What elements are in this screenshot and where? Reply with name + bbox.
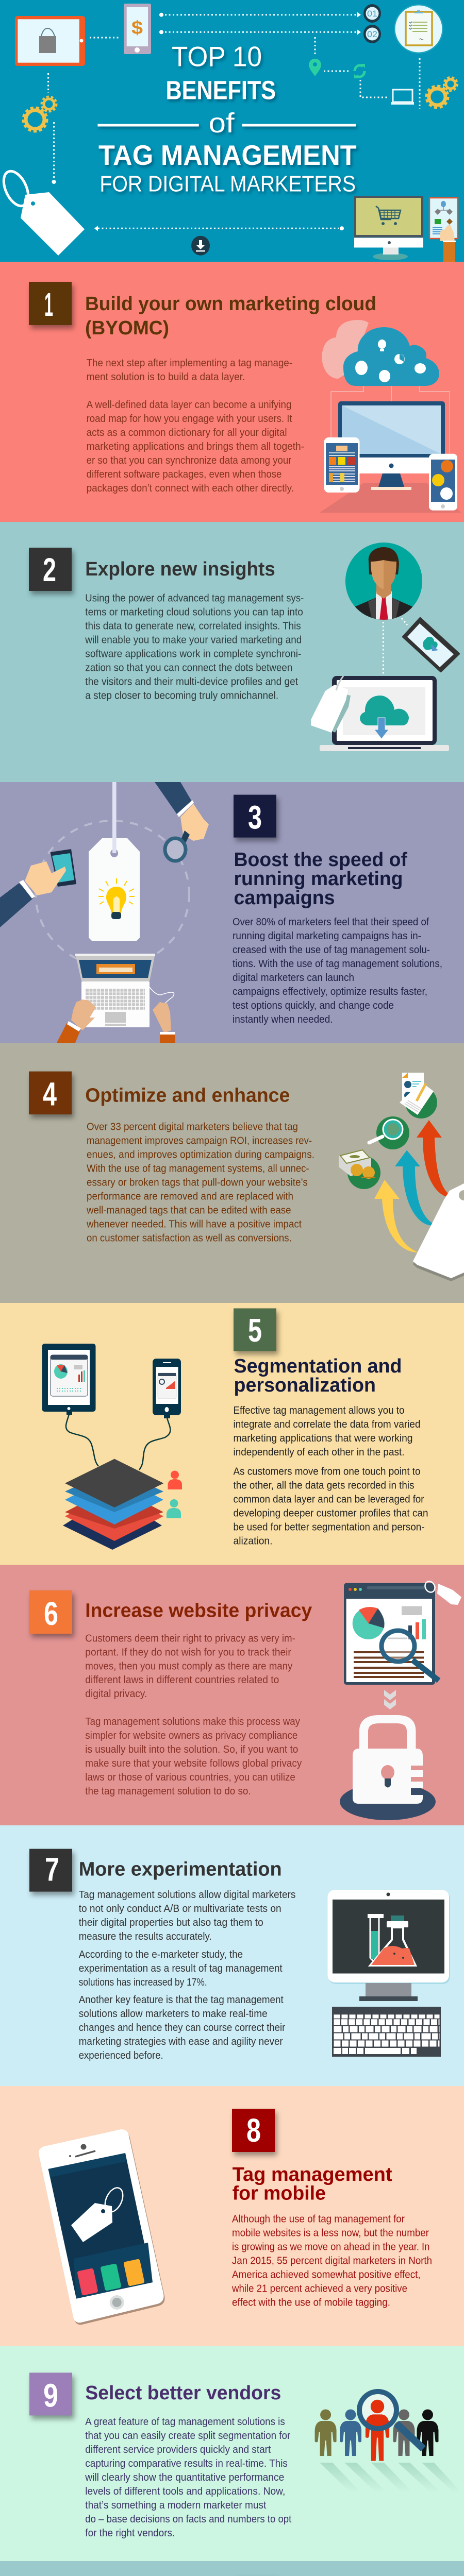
icon: refresh arrows — [354, 64, 365, 78]
icon: badge 01: 01 — [367, 9, 377, 19]
arrow: dotted line to 01 — [159, 12, 361, 18]
heading — [234, 1355, 402, 1396]
body text: essary or broken tags that pull-down your website’s — [87, 1177, 308, 1188]
number box 8 — [232, 2109, 275, 2152]
body text: integrate and correlate the data from varied — [233, 1418, 421, 1430]
body text: moves, then you must comply as there are many — [85, 1660, 293, 1672]
body text: creased with the use of tag management solu- — [233, 944, 430, 956]
icon: large price tag — [0, 167, 85, 256]
panel: section 7 more experimentation — [0, 1825, 464, 2086]
icon: gears left — [23, 97, 57, 131]
body text — [233, 916, 442, 1025]
icon: phone with dollar sign: $ — [131, 17, 143, 38]
illustration: hand with magnifier — [155, 782, 209, 861]
heading: personalization — [234, 1375, 376, 1396]
number box 2: 2 — [43, 551, 56, 588]
title: TOP 10 — [172, 40, 262, 72]
heading: Boost the speed of — [234, 849, 407, 871]
body text: whenever needed. This will have a positive impact — [86, 1218, 302, 1230]
body text: mobile websites is a less now, but the number — [232, 2227, 429, 2239]
body text: experimentation as a result of tag management — [79, 1962, 283, 1974]
heading: for mobile — [233, 2182, 326, 2204]
illustration: stacked layers — [63, 1459, 163, 1550]
heading: More experimentation — [79, 1859, 282, 1880]
number box 2 — [29, 548, 72, 591]
heading — [85, 293, 376, 339]
heading: Segmentation and — [234, 1355, 402, 1377]
body text: on customer satisfaction as well as conversions. — [87, 1232, 292, 1244]
illustration: documents on green circle — [400, 1073, 437, 1118]
body text: Customers deem their right to privacy as very im- — [85, 1633, 295, 1645]
panel: section 10 reduce digital marketing costs — [0, 2561, 464, 2576]
icon: clipboard — [394, 4, 443, 54]
body text: independently of each other in the past. — [233, 1446, 404, 1458]
arrow: dotted line to 02 — [159, 29, 361, 35]
body text: A well-defined data layer can become a unifying — [87, 399, 291, 411]
body text — [85, 2416, 292, 2539]
body text: a step closer to becoming truly omnichannel. — [85, 689, 278, 702]
body text: different service providers quickly and start — [85, 2444, 271, 2455]
icon: badge 02 — [363, 25, 381, 43]
number box 1: 1 — [44, 286, 53, 323]
body text: different software packages, even when those — [87, 468, 281, 480]
body text: simpler for website owners as privacy compliance — [85, 1730, 297, 1741]
illustration: big white tag — [413, 1183, 464, 1281]
body text: levels of different tools and applications. Now, — [85, 2485, 285, 2497]
body text: for the right vendors. — [85, 2527, 175, 2539]
body text: management improves campaign ROI, increases rev- — [87, 1134, 312, 1147]
body text — [86, 1121, 314, 1244]
body text: while 21 percent achieved a very positive — [231, 2282, 407, 2295]
body text: capturing comparative results in real-time. This — [85, 2458, 288, 2469]
panel: header — [0, 0, 464, 262]
icon: gears right — [426, 77, 457, 108]
number box 3 — [234, 795, 276, 838]
illustration: phone — [153, 1359, 181, 1418]
heading: running marketing — [234, 868, 403, 890]
title: TAG MANAGEMENT — [98, 139, 357, 171]
heading: Tag management — [233, 2164, 392, 2185]
number box 8: 8 — [246, 2112, 261, 2149]
body text: the visitors and their multi-device profiles and get — [85, 676, 298, 687]
icon: laptop — [391, 90, 414, 105]
illustration: laptop with cloud download and tag — [311, 676, 449, 751]
body text: Another key feature is that the tag management — [79, 1994, 284, 2006]
body text: digital privacy. — [85, 1688, 147, 1700]
icon: location pin — [309, 59, 321, 76]
title: of — [209, 108, 235, 139]
body text: common data layer and can be leveraged for — [233, 1493, 424, 1505]
body text — [233, 1404, 428, 1547]
body text: Although the use of tag management for — [232, 2213, 405, 2225]
body text: ment solution is to build a data layer. — [87, 371, 245, 383]
illustration: tablet — [42, 1344, 96, 1415]
body text: portant. If they do not wish for you to track their — [85, 1647, 291, 1658]
illustration: phone with tag — [39, 2129, 165, 2325]
body text: digital marketers can launch — [233, 972, 354, 984]
illustration: laptop with hands — [57, 954, 175, 1043]
body text: performance are removed and are replaced with — [87, 1190, 293, 1202]
number box 6 — [29, 1590, 72, 1634]
illustration: hand holding phone — [0, 849, 76, 927]
icon: badge 02: 02 — [367, 29, 377, 39]
body text: this data to generate new, correlated insights. This — [85, 620, 301, 632]
number box 4 — [29, 1072, 72, 1114]
body text: Jan 2015, 55 percent digital marketers in North — [232, 2255, 432, 2267]
title — [97, 40, 357, 197]
body text: is growing as we move on ahead in the year. In — [232, 2241, 429, 2252]
body text: different laws in different countries related to — [85, 1674, 279, 1686]
body text: changes and hence they can course correct their — [79, 2022, 285, 2033]
illustration: hanging tag with light bulb — [36, 782, 189, 967]
body text: instantly when needed. — [233, 1013, 333, 1025]
number box 9: 9 — [43, 2377, 58, 2414]
body text: well-managed tags that can be edited with ease — [86, 1205, 291, 1216]
body text: measure the results accurately. — [79, 1930, 212, 1942]
illustration: businessman avatar — [345, 543, 422, 621]
body text: The next step after implementing a tag manage- — [87, 357, 292, 369]
number box 7 — [29, 1849, 72, 1892]
illustration: browser window with analytics — [344, 1583, 439, 1685]
illustration: keyboard — [332, 2007, 441, 2057]
panel: section 8 tag management for mobile — [0, 2086, 464, 2346]
body text: their digital properties but also tag them to — [79, 1917, 263, 1928]
body text: Over 33 percent digital marketers believe that tag — [87, 1121, 298, 1132]
body text — [79, 1889, 295, 2061]
number box 7: 7 — [45, 1851, 59, 1888]
body text — [85, 592, 304, 702]
body text: software applications work in complete synchroni- — [85, 648, 301, 659]
body text: enues, and improves optimization during campaigns. — [87, 1149, 314, 1160]
illustration: monitor with lab flask — [328, 1890, 450, 2001]
body text: Over 80% of marketers feel that their speed of — [233, 916, 429, 928]
body text: marketing applications that were working — [233, 1432, 412, 1444]
body text: marketing applications and brings them all togeth- — [87, 440, 304, 452]
heading — [233, 2164, 392, 2204]
illustration: magnifier on green circle — [369, 1116, 409, 1149]
body text — [231, 2213, 432, 2308]
body text: the tag management solution to do so. — [85, 1785, 251, 1797]
icon: down chevrons — [384, 1690, 396, 1709]
number box 4: 4 — [43, 1076, 57, 1113]
body text: alization. — [233, 1535, 272, 1547]
icon: download button — [191, 236, 210, 256]
body text: Tag management solutions make this process way — [85, 1716, 301, 1727]
body text: solutions has increased by 17%. — [79, 1976, 207, 1988]
panel: section 6 increase website privacy — [0, 1565, 464, 1825]
heading: (BYOMC) — [85, 317, 169, 339]
panel: section 4 optimize and enhance — [0, 1043, 464, 1303]
body text: tions. With the use of tag management solutions, — [233, 958, 442, 970]
body text: is usually built into the solution. So, if you want to — [85, 1743, 298, 1755]
body text: marketing strategies with ease and agility never — [79, 2036, 283, 2047]
heading: Increase website privacy — [85, 1600, 312, 1622]
icon: flowchart card with hand — [429, 198, 458, 262]
arrows: growth arrows yellow blue red — [374, 1120, 454, 1252]
body text: road map for how you engage with your users. It — [87, 413, 292, 425]
title: BENEFITS — [166, 76, 276, 105]
body text: test options quickly, and change code — [233, 999, 394, 1011]
body text: Effective tag management allows you to — [233, 1404, 404, 1416]
body text: A great feature of tag management solutions is — [85, 2416, 285, 2428]
body text: Tag management solutions allow digital marketers — [79, 1889, 295, 1901]
body text: make sure that your website follows global privacy — [85, 1757, 302, 1769]
body text: be used for better segmentation and person- — [233, 1521, 425, 1533]
body text: will clearly show the quantitative performance — [85, 2471, 284, 2483]
illustration: padlock — [340, 1715, 436, 1820]
icon: small tag — [423, 1580, 461, 1605]
body text: acts as a common dictionary for all your digital — [87, 427, 287, 438]
body text: developing deeper customer profiles that can — [233, 1507, 428, 1519]
panel: section 2 explore new insights — [0, 522, 464, 782]
body text: that’s something a modern marketer must — [85, 2499, 267, 2511]
body text: campaigns effectively, optimize results faster, — [233, 986, 427, 997]
body text: With the use of tag management systems, all unnec- — [87, 1162, 309, 1175]
icon: phone with dollar sign — [124, 4, 151, 54]
body text: the other, all the data gets recorded in this — [233, 1480, 415, 1491]
body text: er so that you can synchronize data among your — [87, 454, 292, 466]
heading: Select better vendors — [85, 2382, 281, 2404]
number box 9 — [29, 2372, 72, 2415]
panel: section 5 segmentation and personalization — [0, 1303, 464, 1565]
body text: to not only conduct A/B or multivariate tests on — [79, 1903, 281, 1914]
body text: that you can easily create split segmentation for — [85, 2430, 290, 2442]
arrow: dotted line to tag — [94, 226, 344, 231]
number box 3: 3 — [248, 799, 262, 836]
body text: zation so that you can connect the dots between — [85, 662, 292, 674]
body text: Using the power of advanced tag management sys- — [85, 592, 304, 604]
body text: America achieved somewhat positive effect, — [232, 2269, 421, 2280]
body text — [87, 357, 304, 494]
title: FOR DIGITAL MARKETERS — [100, 172, 356, 197]
body text: will enable you to make your varied marketing and — [85, 634, 302, 646]
number box 6: 6 — [44, 1595, 58, 1632]
heading: Explore new insights — [85, 558, 275, 580]
body text: tems or marketing cloud solutions you can tap into — [85, 606, 303, 618]
illustration: tilted phone — [403, 618, 459, 671]
panel: section 9 select better vendors — [0, 2346, 464, 2561]
illustration: money stack and coins — [339, 1149, 380, 1189]
body text: do – base decisions on facts and numbers to opt — [85, 2513, 292, 2525]
body text: packages don’t connect with each other directly. — [87, 482, 294, 494]
illustration: people under magnifier — [315, 2392, 461, 2493]
body text: laws or those of various countries, you can utilize — [85, 1771, 295, 1783]
panel: section 3 boost the speed — [0, 782, 464, 1043]
icon: red person — [168, 1470, 182, 1489]
body text: According to the e-marketer study, the — [79, 1948, 243, 1960]
number box 5: 5 — [248, 1312, 262, 1349]
body text: experienced before. — [79, 2049, 163, 2061]
illustration: cloud, monitor and phones — [320, 320, 461, 513]
body text: solutions allow marketers to make real-time — [79, 2008, 268, 2020]
body text — [85, 1633, 302, 1797]
body text: running digital marketing campaigns has in- — [233, 930, 421, 942]
heading: Optimize and enhance — [85, 1085, 290, 1107]
heading: campaigns — [234, 887, 335, 909]
icon: desktop with shopping cart — [354, 196, 423, 260]
heading — [234, 849, 407, 909]
body text: As customers move from one touch point to — [233, 1465, 421, 1478]
panel: section 1 build your own marketing cloud — [0, 262, 464, 522]
body text: effect with the use of mobile tagging. — [232, 2297, 390, 2308]
icon: badge 01 — [363, 4, 381, 23]
number box 1 — [29, 282, 72, 325]
icon: tablet with shopping bag — [15, 16, 85, 66]
icon: teal person — [167, 1499, 181, 1518]
illustration: cables — [66, 1414, 170, 1470]
number box 5 — [234, 1309, 276, 1351]
heading: Build your own marketing cloud — [85, 293, 376, 315]
